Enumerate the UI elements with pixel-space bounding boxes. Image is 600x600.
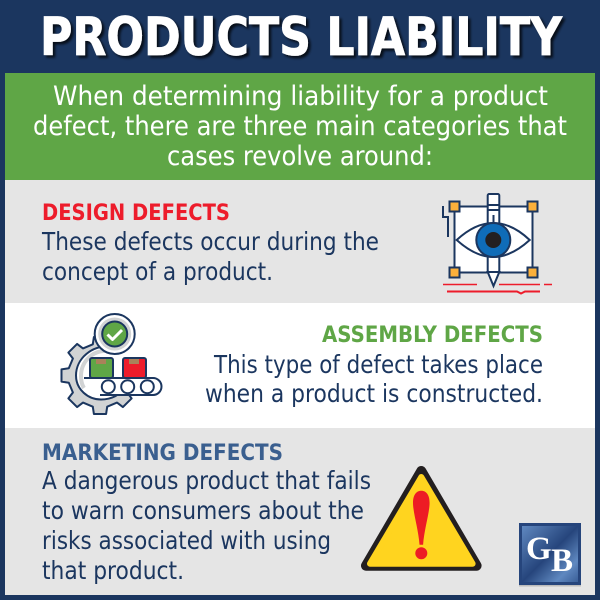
text: marketing defects description: to warn consumers about the [42, 496, 364, 525]
icon: eye and pencil design tool [443, 194, 552, 294]
panel: assembly defects [5, 303, 595, 428]
panel: marketing defects [5, 428, 595, 595]
text: marketing defects description: risks associated with using [42, 526, 331, 555]
text: assembly defects description: when a product is constructed. [205, 379, 543, 408]
logo: GB: G [526, 531, 552, 567]
text: assembly defects description [205, 350, 543, 408]
icon: warning triangle [366, 471, 477, 566]
heading: marketing defects: MARKETING DEFECTS [42, 440, 283, 466]
text: design defects description [41, 227, 379, 286]
panel: introduction [5, 73, 595, 180]
text: design defects description: These defects occur during the [41, 227, 379, 256]
panel: design defects [5, 180, 595, 303]
logo: GB: B [551, 543, 573, 579]
panel: introduction: When determining liability for a product [53, 81, 548, 112]
icon: gear with conveyor and check mark [62, 314, 162, 414]
text: design defects description: concept of a product. [42, 257, 273, 286]
heading: assembly defects: ASSEMBLY DEFECTS [322, 322, 543, 348]
panel: introduction: cases revolve around: [167, 141, 433, 172]
text: marketing defects description: that product. [42, 556, 184, 585]
heading: design defects: DESIGN DEFECTS [42, 200, 230, 226]
text: marketing defects description [42, 466, 371, 585]
text: marketing defects description: A dangerous product that fails [42, 466, 371, 495]
text: assembly defects description: This type of defect takes place [213, 350, 543, 379]
logo: GB [519, 523, 581, 586]
